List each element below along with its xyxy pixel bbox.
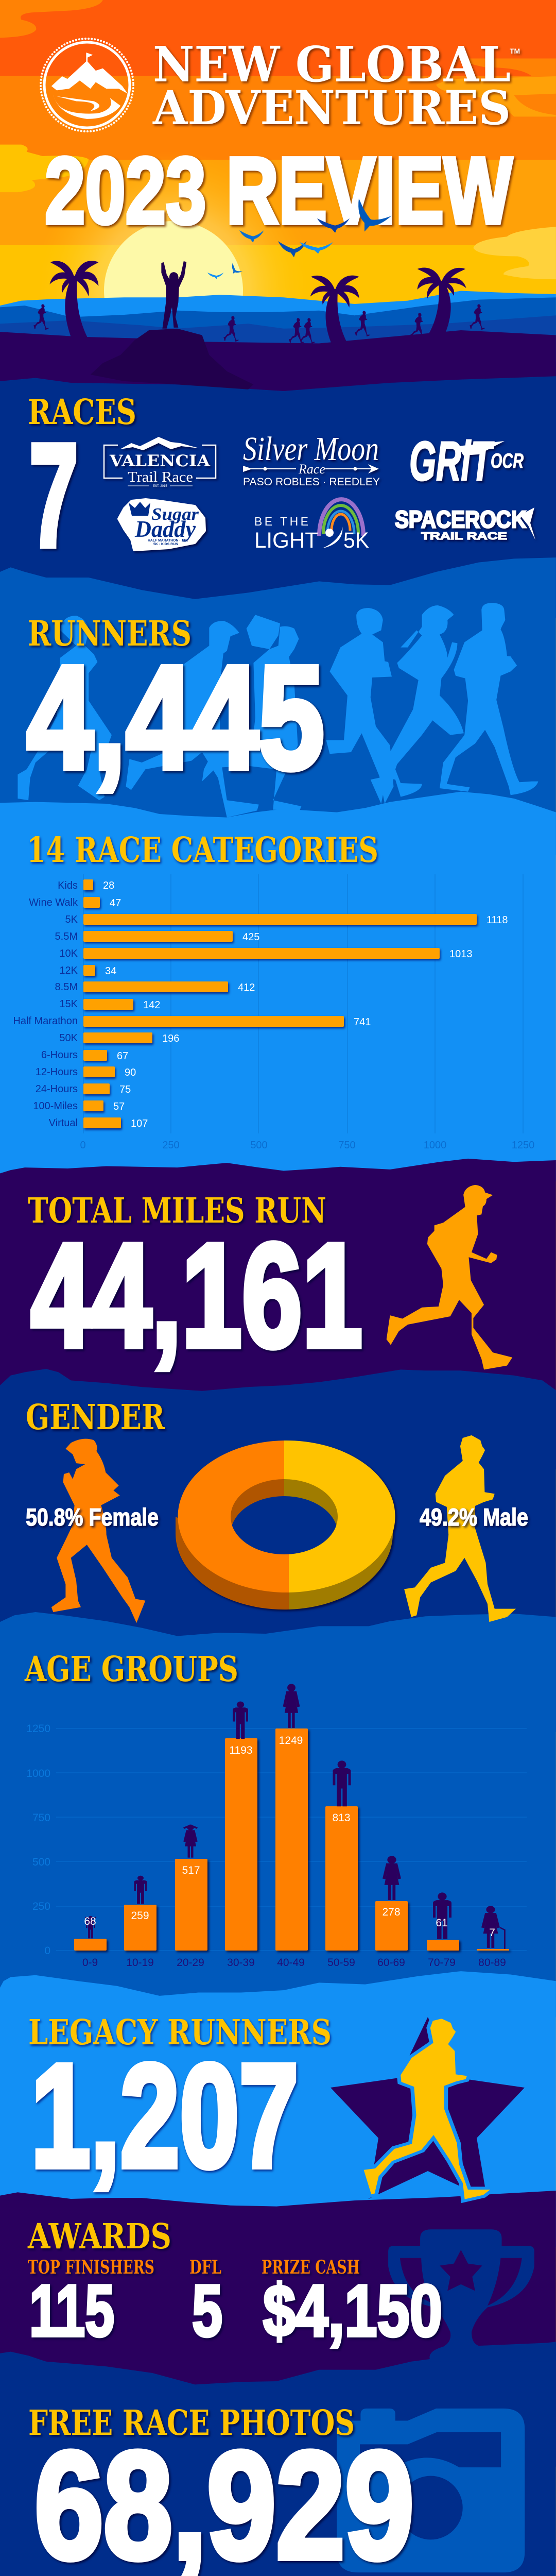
logo: Spacerock Trail Race: TRAIL RACE <box>421 531 507 542</box>
header landscape hills and ground <box>0 291 556 391</box>
bar chart: race categories: 75 <box>119 1084 131 1095</box>
logo: Silver Moon Race: Silver Moon <box>243 430 379 468</box>
number: 44,161 miles: 44,161 <box>31 1213 362 1378</box>
bar chart: age groups: 1193 <box>229 1744 253 1756</box>
heading: 14 race categories: 14 RACE CATEGORIES <box>27 829 378 870</box>
stat: DFL: DFL <box>189 2257 221 2278</box>
heading: total miles run: TOTAL MILES RUN <box>28 1190 326 1231</box>
stat: prize cash: $4,150 <box>263 2270 442 2352</box>
bar chart: age groups: 60-69 <box>377 1957 405 1969</box>
bar chart: race categories: 8.5M <box>55 981 78 993</box>
bar chart: age groups <box>26 1684 527 1969</box>
bar chart: race categories: 1013 <box>449 948 473 960</box>
bar chart: race categories: 0 <box>80 1140 86 1151</box>
bar chart: race categories: 12K <box>59 965 78 976</box>
bar chart: race categories: 57 <box>113 1101 125 1112</box>
icons: person figures on bars <box>85 1684 505 1949</box>
bar chart: race categories: 750 <box>338 1140 356 1151</box>
bar chart: age groups: 1249 <box>279 1735 303 1747</box>
bar chart: race categories: 741 <box>354 1016 371 1028</box>
bar chart: age groups: 40-49 <box>277 1957 305 1969</box>
bar chart: age groups: 250 <box>32 1901 50 1912</box>
heading: awards: AWARDS <box>27 2216 171 2257</box>
bar chart: age groups: 500 <box>32 1856 50 1868</box>
bar chart: race categories: 24-Hours <box>36 1083 78 1095</box>
bar chart: age groups: 750 <box>32 1812 50 1824</box>
bar chart: race categories: 50K <box>59 1032 78 1044</box>
bar chart: race categories: 34 <box>105 965 116 977</box>
bar chart: age groups: 20-29 <box>177 1957 204 1969</box>
stat: DFL: 5 <box>192 2270 222 2352</box>
bar chart: age groups: 0-9 <box>82 1957 98 1969</box>
logo: Be The Light 5K: BE THE <box>254 515 308 528</box>
bar chart: age groups: 1000 <box>26 1768 50 1780</box>
number: 4,445 runners: 4,445 <box>27 636 324 800</box>
bar chart: race categories: Half Marathon <box>13 1015 78 1027</box>
logo: Be The Light 5K: 5K <box>343 528 369 553</box>
heading: runners: RUNNERS <box>28 613 192 654</box>
icon: flock of birds <box>207 198 392 279</box>
bar chart: race categories: 10K <box>59 948 78 959</box>
title: company name: ADVENTURES <box>152 81 511 135</box>
bar chart: race categories: 15K <box>59 998 78 1010</box>
bar chart: race categories: 100-Miles <box>33 1100 78 1112</box>
bar chart: age groups: 61 <box>436 1917 448 1929</box>
logo: Valencia Trail Race: Trail Race <box>128 469 193 485</box>
icon: legacy runner <box>361 2017 495 2201</box>
bar chart: race categories: 90 <box>125 1067 136 1078</box>
title: company name: NEW GLOBAL <box>153 36 511 93</box>
bar chart: race categories: 142 <box>143 999 160 1011</box>
bar chart: age groups: 259 <box>131 1910 149 1922</box>
icon: palm trees <box>49 261 466 345</box>
bar chart: race categories: 425 <box>242 931 259 943</box>
small runner silhouettes <box>33 304 485 344</box>
bar chart: age groups: 1250 <box>26 1723 50 1735</box>
title: company name <box>152 36 520 135</box>
bar chart: race categories: Wine Walk <box>29 897 78 908</box>
logo: Sugar Daddy: 5K · KIDS RUN <box>153 543 178 546</box>
logo: Sugar Daddy <box>119 500 204 550</box>
icon: camera <box>337 2409 525 2572</box>
logo: Spacerock Trail Race: SPACEROCK <box>395 506 526 533</box>
logo: Sugar Daddy: Sugar <box>151 505 199 524</box>
logo: Silver Moon Race: PASO ROBLES · REEDLEY <box>243 476 380 488</box>
section backgrounds with torn edges <box>0 557 556 2576</box>
bar chart: race categories: 12-Hours <box>36 1066 78 1078</box>
stat: DFL <box>189 2257 222 2352</box>
panel: races background <box>0 361 556 618</box>
logo: Valencia Trail Race <box>104 437 216 488</box>
label: male share: 49.2% Male <box>420 1503 528 1531</box>
bar chart: age groups: 517 <box>182 1865 200 1876</box>
bar chart: race categories: 500 <box>250 1140 268 1151</box>
bar chart: age groups: 7 <box>489 1927 495 1939</box>
logo: GRIT OCR: OCR <box>491 450 524 472</box>
heading: races: RACES <box>28 392 136 432</box>
logo: Valencia Trail Race: EST. 2015 <box>153 485 167 488</box>
logo: Be The Light 5K <box>254 499 369 553</box>
panel: header sky <box>0 0 556 430</box>
bar chart: age groups: 30-39 <box>227 1957 255 1969</box>
logo: Valencia Trail Race: VALENCIA <box>109 452 211 470</box>
heading: free race photos: FREE RACE PHOTOS <box>28 2402 355 2443</box>
title: company name: TM <box>510 47 520 55</box>
bar chart: age groups: 278 <box>382 1906 401 1918</box>
bar chart: age groups: 50-59 <box>327 1957 355 1969</box>
label: female share: 50.8% Female <box>26 1503 159 1531</box>
icon: sun <box>104 221 243 360</box>
logo: Silver Moon Race: Race <box>298 462 325 477</box>
giant runner silhouettes behind runners count <box>18 603 538 818</box>
logo: Sugar Daddy: Daddy <box>134 516 196 542</box>
icon: trophy <box>388 2229 556 2362</box>
bar chart: age groups: 10-19 <box>126 1957 154 1969</box>
logo: Silver Moon Race <box>243 430 380 488</box>
heading: legacy runners: LEGACY RUNNERS <box>28 2012 332 2053</box>
heading: gender: GENDER <box>26 1397 165 1437</box>
icon: triumphant woman silhouette <box>161 261 186 329</box>
bar chart: race categories: Virtual <box>49 1117 78 1129</box>
stat: prize cash: PRIZE CASH <box>262 2257 360 2278</box>
bar chart: race categories: 196 <box>162 1033 179 1044</box>
stat: top finishers: 115 <box>29 2270 114 2352</box>
bar chart: race categories: 1118 <box>486 914 508 926</box>
bar chart: age groups: 68 <box>84 1916 96 1927</box>
donut chart: gender split <box>176 1440 395 1609</box>
logo: New Global Adventures mountain badge <box>41 39 133 131</box>
bar chart: race categories: 1250 <box>512 1140 534 1151</box>
bar chart: race categories: 47 <box>110 897 121 909</box>
bar chart: race categories: Kids <box>58 880 78 891</box>
number: 7 races: 7 <box>29 414 78 577</box>
bar chart: race categories: 412 <box>238 982 255 993</box>
stat: top finishers: TOP FINISHERS <box>28 2257 154 2278</box>
logo: GRIT OCR: GRiT <box>409 430 494 492</box>
number: 1,207 legacy runners: 1,207 <box>31 2034 299 2198</box>
bar chart: race categories <box>13 874 534 1151</box>
icon: male runner <box>404 1435 516 1622</box>
bar chart: race categories: 107 <box>131 1118 148 1129</box>
icon: orange runner <box>387 1185 512 1369</box>
bar chart: race categories: 250 <box>162 1140 180 1151</box>
bar chart: race categories: 1000 <box>424 1140 446 1151</box>
bar chart: race categories: 67 <box>117 1050 128 1062</box>
bar chart: age groups: 70-79 <box>428 1957 456 1969</box>
icon: female runner <box>51 1439 145 1623</box>
logo: Sugar Daddy: HALF MARATHON · 10K <box>148 539 188 543</box>
bar chart: age groups: 80-89 <box>478 1957 506 1969</box>
bar chart: race categories: 28 <box>103 880 114 891</box>
bar chart: age groups: 813 <box>332 1812 351 1824</box>
bar chart: race categories: 6-Hours <box>41 1049 78 1061</box>
icon: star <box>331 2017 525 2199</box>
bar chart: race categories: 5K <box>65 914 78 925</box>
bar chart: race categories: 5.5M <box>55 931 78 942</box>
bar chart: age groups: 0 <box>44 1945 50 1957</box>
heading: age groups: AGE GROUPS <box>24 1649 238 1689</box>
logo: Be The Light 5K: LIGHT <box>254 528 318 553</box>
